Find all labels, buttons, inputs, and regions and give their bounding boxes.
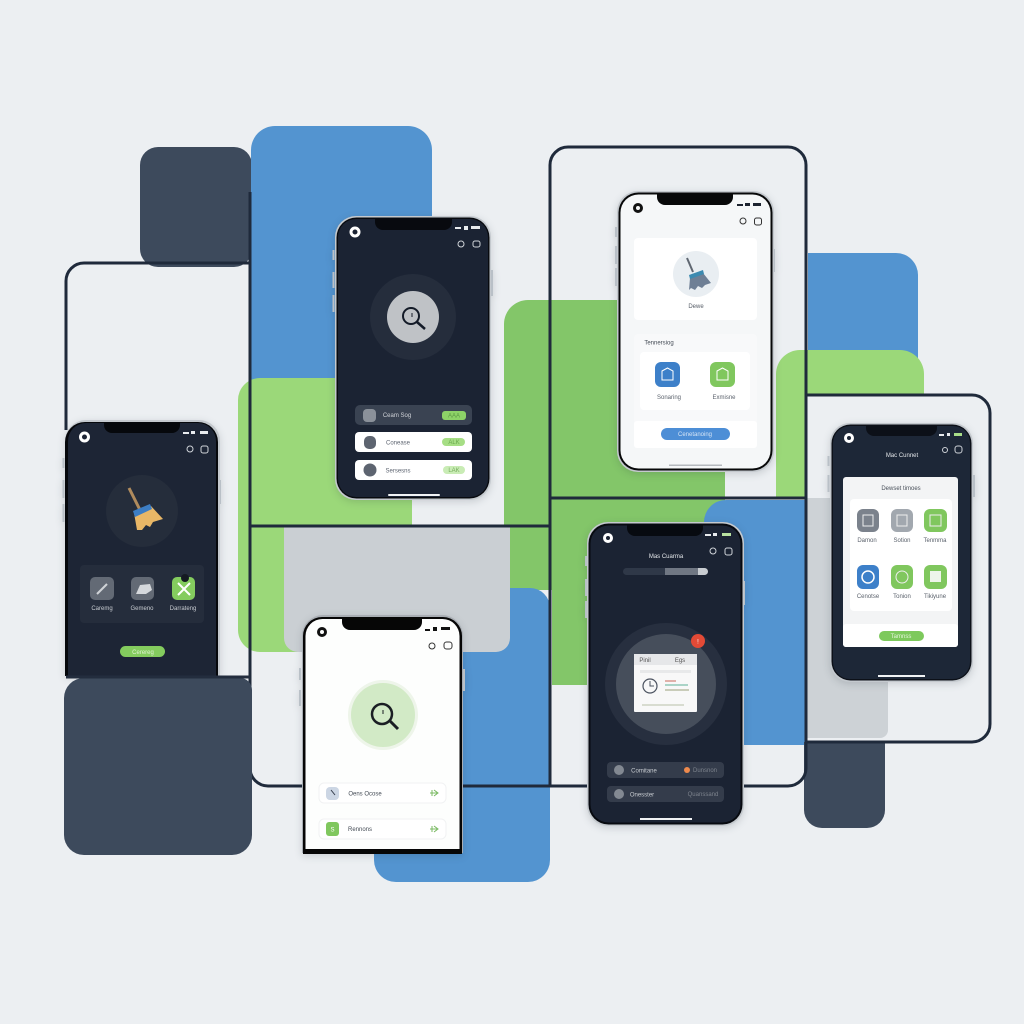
row 2: Conease	[386, 440, 411, 446]
tool panel	[80, 565, 204, 623]
card: options: Tennersiog	[644, 340, 674, 346]
list row 2: Onesster	[630, 792, 654, 798]
card: app grid	[843, 477, 958, 647]
dark block over phone base	[64, 678, 252, 855]
screen	[833, 426, 970, 679]
phone: dark broom	[62, 420, 221, 676]
row 2: ALK	[448, 440, 460, 446]
card: app grid: Cenotse	[857, 594, 880, 600]
row 3: LAK	[448, 468, 460, 474]
row 2: Rennons	[348, 827, 372, 833]
button	[120, 646, 165, 657]
card: app grid: Tonion	[893, 594, 911, 600]
row 3: Sersesns	[385, 468, 411, 474]
storage dial: Egs	[675, 658, 685, 664]
row 3	[355, 460, 472, 480]
phone: dark apps grid	[828, 423, 975, 682]
card: app grid: Dewset timoes	[881, 486, 921, 492]
card: app grid: Tenmma	[923, 538, 947, 544]
scan dial	[370, 274, 456, 360]
list row 2: Quanssand	[688, 792, 718, 798]
card: broom	[634, 238, 757, 320]
screen	[590, 526, 740, 822]
list row 1	[607, 762, 724, 778]
row 2	[319, 819, 446, 839]
list row 1: Dunsnon	[693, 768, 717, 774]
list row 2	[607, 786, 724, 802]
screen	[620, 194, 770, 468]
storage dial: Pinil	[639, 658, 651, 664]
phone: dark storage	[585, 522, 745, 826]
storage dial	[605, 623, 727, 745]
row 2: S	[330, 828, 335, 834]
card: options: Sonaring	[657, 395, 681, 401]
card: app grid: Tikiyune	[924, 594, 947, 600]
card: broom: Dewe	[688, 304, 704, 310]
card: app grid: Sotion	[893, 538, 911, 544]
tool panel: Gemeno	[130, 606, 154, 612]
tool panel: Caremg	[91, 606, 113, 612]
tool panel: Darrateng	[170, 606, 196, 612]
background color blocks	[140, 126, 924, 882]
progress bar	[623, 568, 708, 575]
outline frames	[66, 147, 990, 786]
scan dial	[348, 680, 418, 750]
list row 1: Comitane	[631, 768, 657, 774]
row 1: AAA	[448, 414, 460, 420]
card: options: Exmisne	[712, 395, 736, 401]
screen	[306, 619, 460, 849]
row 1	[319, 783, 446, 803]
title: Mac Cunnet	[886, 453, 919, 459]
card: app grid: Damon	[857, 538, 877, 544]
row 2	[355, 432, 472, 452]
storage dial: !	[697, 640, 699, 646]
button: Cerereg	[132, 650, 154, 656]
status icons	[351, 226, 480, 236]
phone: light scanner	[299, 615, 465, 854]
card: app grid: Tamnss	[891, 634, 911, 640]
row 1: Oens Ocose	[348, 792, 382, 798]
row 1	[355, 405, 472, 425]
card: options: Cenetanoing	[678, 432, 712, 438]
row 1: Ceam Sog	[383, 413, 411, 419]
phone: light broom	[615, 191, 775, 472]
card: options	[634, 334, 757, 448]
screen	[68, 423, 216, 676]
phone: dark scanner	[332, 216, 493, 500]
screen	[338, 219, 488, 497]
broom dial	[106, 475, 178, 547]
title: Mas Cuarma	[649, 554, 684, 560]
